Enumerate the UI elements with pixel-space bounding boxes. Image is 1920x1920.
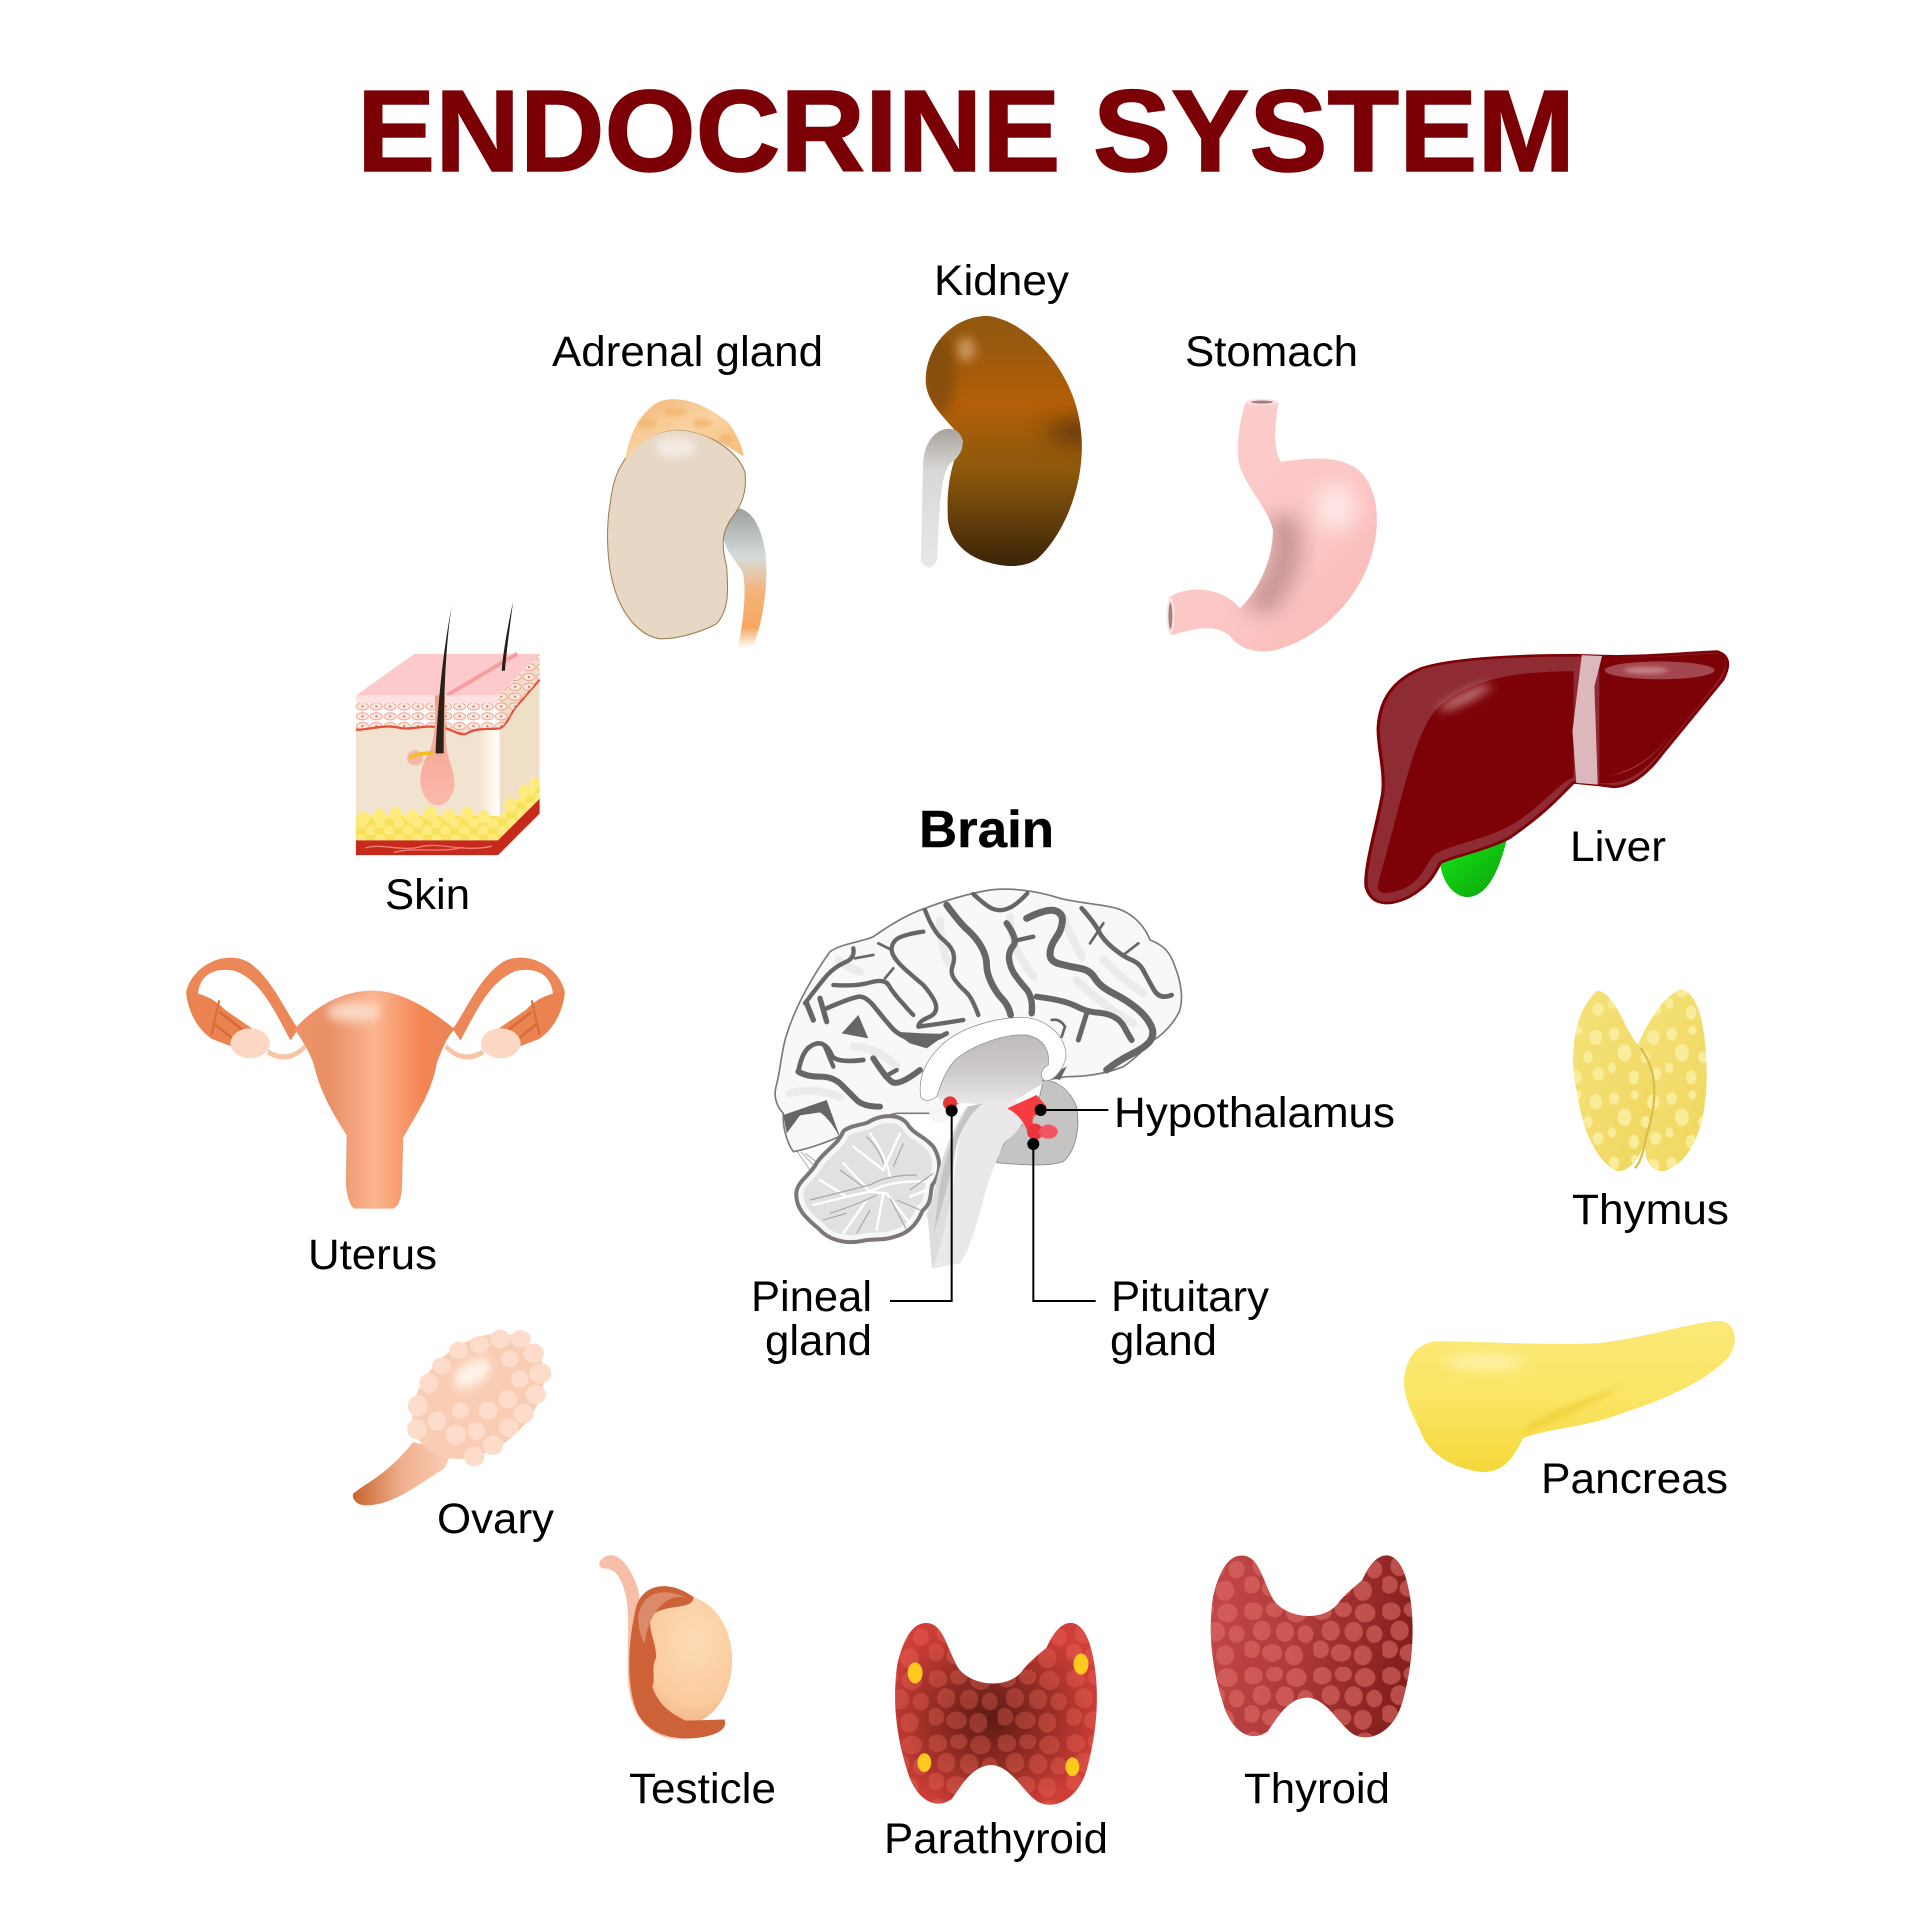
organ: liver xyxy=(1366,652,1728,903)
label: Pineal gland: gland xyxy=(765,1317,872,1365)
adrenal mottling xyxy=(638,408,735,443)
kidney highlight xyxy=(655,437,696,458)
label: Parathyroid: Parathyroid xyxy=(884,1815,1108,1863)
title: ENDOCRINE SYSTEM xyxy=(357,66,1575,196)
epididymis highlight xyxy=(638,1592,686,1643)
marker dots xyxy=(946,1104,1047,1150)
sebaceous gland xyxy=(407,750,434,765)
label: Testicle: Testicle xyxy=(629,1765,776,1813)
pineal lobe xyxy=(929,1104,951,1123)
testis ball xyxy=(636,1596,732,1725)
liver right lobe xyxy=(1599,653,1725,783)
fat layer xyxy=(356,778,540,840)
pancreas highlight xyxy=(1445,1355,1526,1369)
cerebrum sulci xyxy=(798,893,1172,1107)
label: Liver: Liver xyxy=(1570,823,1666,871)
kidney xyxy=(608,430,745,639)
sperm duct and sac xyxy=(599,1555,690,1740)
skin dermis front xyxy=(356,727,500,820)
organ: thyroid xyxy=(1211,1555,1413,1737)
organ: ovary xyxy=(353,1311,555,1505)
gallbladder xyxy=(1440,836,1508,897)
thymus left lobe xyxy=(1573,991,1654,1171)
ureter xyxy=(724,508,766,648)
corpus callosum xyxy=(920,1017,1066,1100)
uterus highlight xyxy=(326,1003,381,1021)
cerebellum fine lines xyxy=(810,1137,933,1233)
organ: thymus xyxy=(1573,989,1707,1171)
kidney shading xyxy=(926,334,1082,455)
leader: pituitary xyxy=(1033,1144,1096,1301)
fallopian tube xyxy=(186,958,298,1040)
organ: stomach xyxy=(1167,399,1377,651)
organ: parathyroid xyxy=(895,1623,1097,1805)
label: Pineal gland: Pineal xyxy=(751,1273,872,1321)
parathyroid body xyxy=(895,1623,1097,1805)
label: Pituitary gland xyxy=(1110,1273,1269,1365)
rear stem band over xyxy=(934,1103,983,1233)
parathyroid cells xyxy=(895,1623,1097,1805)
label: Thyroid: Thyroid xyxy=(1244,1765,1390,1813)
deep layer xyxy=(356,799,540,855)
stomach body xyxy=(1169,403,1377,651)
organ: kidney xyxy=(921,316,1082,568)
ovary body xyxy=(401,1311,555,1481)
thymus right lobe xyxy=(1638,989,1707,1171)
epidermis front xyxy=(356,703,498,733)
fimbria xyxy=(186,992,253,1048)
right tube and ovary xyxy=(445,958,565,1058)
leader: pineal xyxy=(890,1111,952,1301)
infographic canvas xyxy=(186,88,1735,1862)
skin top face xyxy=(356,654,540,695)
thyroid body xyxy=(1211,1555,1413,1737)
ovary glow xyxy=(451,1354,494,1393)
kidney body xyxy=(926,316,1082,566)
label: Stomach: Stomach xyxy=(1185,328,1358,376)
leader: hypothalamus xyxy=(1041,1107,1108,1113)
label: Ovary: Ovary xyxy=(437,1495,555,1543)
cerebrum dark wedges xyxy=(783,1015,1067,1142)
brain diagram xyxy=(775,889,1181,1301)
organ: adrenal gland on kidney xyxy=(608,399,766,648)
label: Kidney: Kidney xyxy=(934,257,1070,305)
brain rear striations xyxy=(796,1150,818,1170)
deep layer fibres xyxy=(365,845,492,852)
pituitary xyxy=(1027,1124,1058,1140)
hypothalamus xyxy=(1007,1095,1047,1133)
cerebrum light folds xyxy=(790,917,1143,1097)
pancreas body xyxy=(1404,1321,1735,1472)
cerebrum xyxy=(775,889,1181,1152)
pineal gland xyxy=(943,1096,957,1110)
stomach openings xyxy=(1167,399,1278,635)
liver outline xyxy=(1366,652,1728,903)
small ovary xyxy=(230,1028,270,1058)
epidermis edge xyxy=(356,680,540,734)
skin pale strip xyxy=(356,695,498,703)
label: Hypothalamus: Hypothalamus xyxy=(1114,1089,1395,1137)
adrenal cap xyxy=(625,399,744,462)
epididymis xyxy=(629,1586,725,1739)
uterus body xyxy=(294,991,455,1209)
label: Skin: Skin xyxy=(385,871,470,919)
stomach shading xyxy=(1257,483,1355,611)
parathyroid glands xyxy=(908,1653,1088,1776)
liver left lobe xyxy=(1378,671,1574,893)
label: Thymus: Thymus xyxy=(1572,1186,1729,1234)
brainstem rear band xyxy=(927,1103,983,1268)
hairs xyxy=(436,602,513,753)
label: Pancreas: Pancreas xyxy=(1541,1455,1728,1503)
thyroid cells xyxy=(1211,1555,1413,1737)
fat bumps xyxy=(357,778,540,825)
fimbria stripes xyxy=(211,1000,245,1042)
thalamus xyxy=(937,1035,1049,1103)
label: Pituitary gland: gland xyxy=(1110,1317,1217,1365)
organ: skin xyxy=(356,602,540,855)
cerebellum outer xyxy=(801,1121,935,1238)
ovary stalk xyxy=(353,1442,453,1505)
heading: Brain: Brain xyxy=(919,801,1054,859)
cerebellum inner xyxy=(801,1121,935,1238)
label: Uterus: Uterus xyxy=(308,1231,437,1279)
organ: uterus xyxy=(186,958,565,1209)
thymus lobe seam xyxy=(1635,1048,1654,1168)
label: Adrenal gland: Adrenal gland xyxy=(552,328,823,376)
organ: testicle xyxy=(599,1555,732,1740)
forebrain base xyxy=(997,1080,1078,1165)
label: Pineal gland xyxy=(751,1273,872,1365)
epidermis right xyxy=(498,654,540,727)
ureter xyxy=(921,429,963,568)
falciform ligament xyxy=(1572,655,1602,785)
hair follicle xyxy=(420,695,454,805)
brainstem xyxy=(932,1100,1030,1268)
organ: pancreas xyxy=(1404,1321,1735,1472)
skin groove xyxy=(447,654,517,695)
cerebellum branches xyxy=(813,1133,927,1233)
ovary follicles xyxy=(407,1330,551,1466)
label: Pituitary gland: Pituitary xyxy=(1111,1273,1269,1321)
liver highlights xyxy=(1436,661,1715,776)
ligament xyxy=(268,1046,306,1057)
skin right face xyxy=(500,654,540,855)
pancreas shade xyxy=(1520,1385,1623,1435)
left tube and ovary xyxy=(186,958,306,1058)
